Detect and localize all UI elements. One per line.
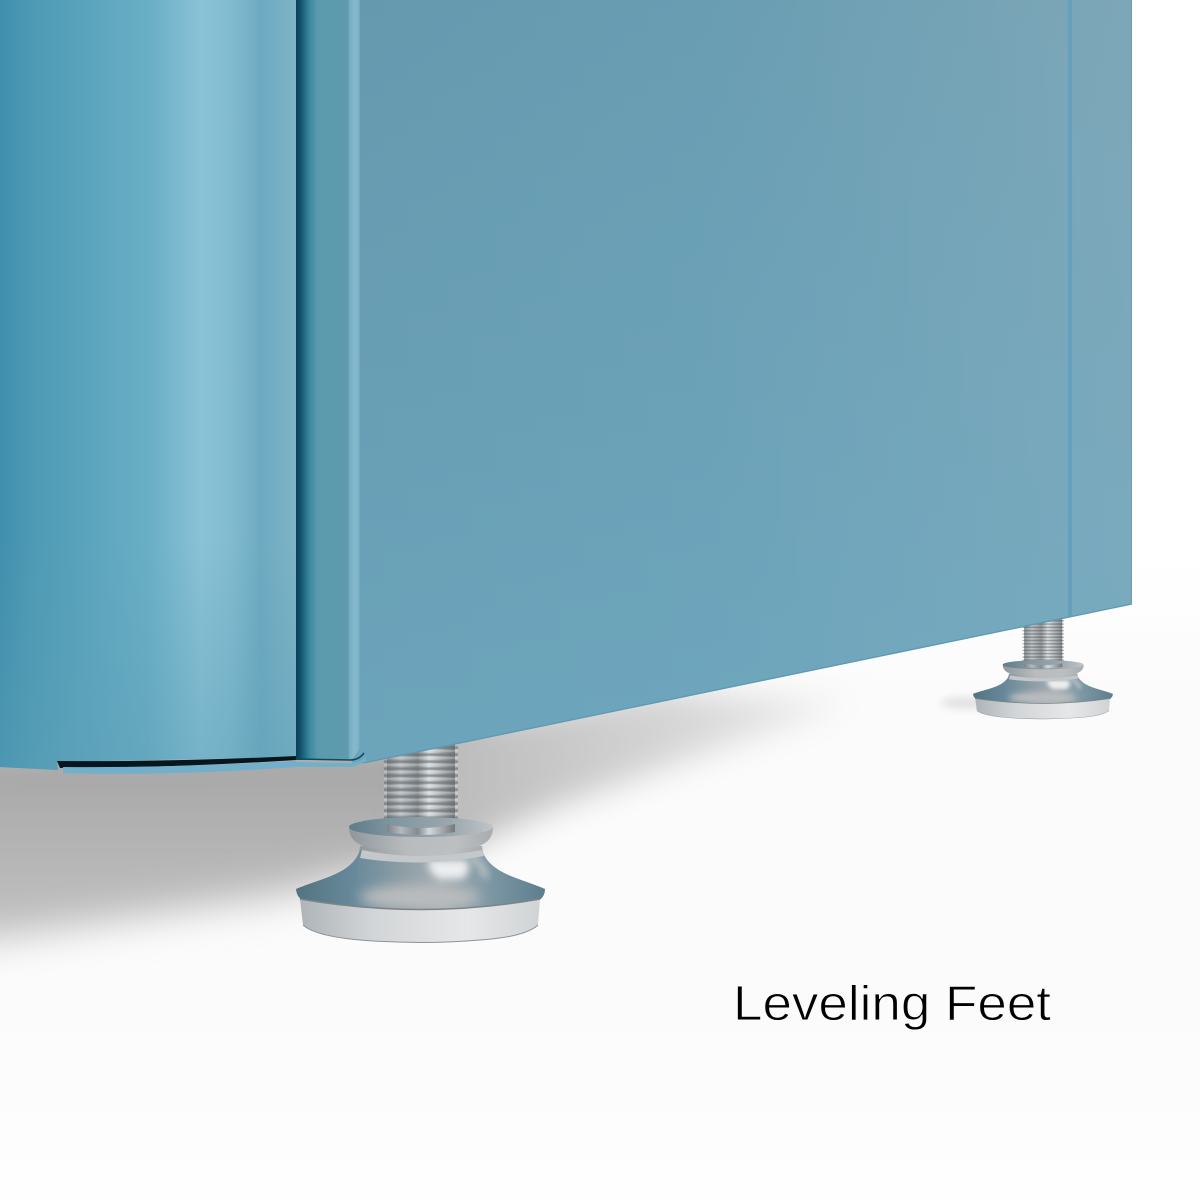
cabinet side panel [352, 0, 1132, 767]
cabinet corner edge [296, 0, 360, 760]
caption: Leveling Feet: Leveling Feet [733, 977, 1051, 1031]
door panel [0, 0, 296, 774]
front foot [296, 725, 545, 942]
floor [0, 560, 1200, 1200]
cabinet bottom edge [296, 604, 1132, 767]
rear foot [973, 617, 1113, 719]
cast shadow [0, 690, 989, 945]
